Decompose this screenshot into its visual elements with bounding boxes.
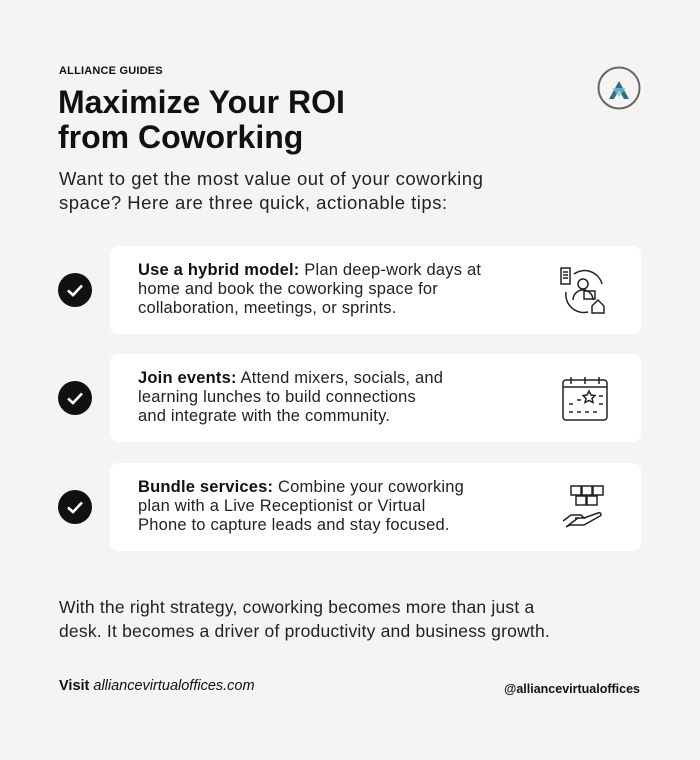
check icon 1 [58,273,92,307]
title: from Coworking [58,119,303,155]
card: events [110,354,641,442]
intro text: space? Here are three quick, actionable tips: [59,192,448,213]
check icon 3 [58,490,92,524]
card: hybrid model: home and book the coworking space for [138,280,438,298]
card: hybrid model [110,246,641,334]
card: bundle services [110,463,641,551]
card: events: learning lunches to build connections [138,388,416,406]
card: events: and integrate with the community. [138,407,390,425]
card: bundle services: Bundle services: Combine your coworking [138,478,464,496]
intro text [59,168,483,213]
title [58,84,345,155]
card: bundle services: Phone to capture leads and stay focused. [138,516,450,534]
closing text: desk. It becomes a driver of productivity and business growth. [59,621,550,641]
card: events: Join events: Attend mixers, socials, and [138,369,443,387]
icon: calendar [562,377,608,421]
card: hybrid model: collaboration, meetings, or sprints. [138,299,396,317]
intro text: Want to get the most value out of your coworking [59,168,483,189]
card: bundle services: plan with a Live Receptionist or Virtual [138,497,425,515]
closing text [59,597,550,641]
check icon 2 [58,381,92,415]
closing text: With the right strategy, coworking becomes more than just a [59,597,534,617]
icon: hybrid [560,267,605,314]
icon: hand with boxes [562,485,604,528]
card: hybrid model: Use a hybrid model: Plan deep-work days at [138,261,481,279]
title: Maximize Your ROI [58,84,345,120]
brand label: ALLIANCE GUIDES [59,65,163,77]
footer website: Visit alliancevirtualoffices.com [59,678,255,694]
logo [598,66,640,110]
footer handle: @alliancevirtualoffices [504,682,640,696]
